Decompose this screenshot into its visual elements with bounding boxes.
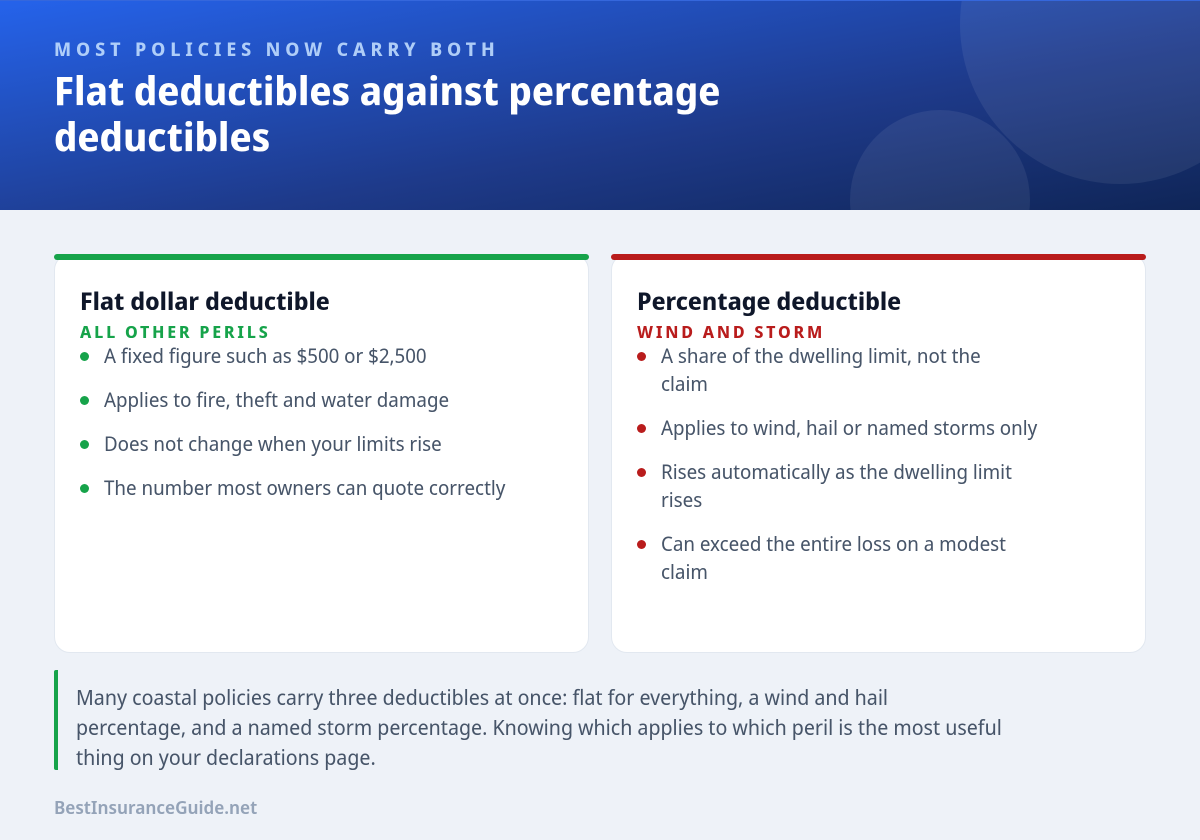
- bullet 2: Applies to fire, theft and water damage: [104, 386, 449, 413]
- footer brand: BestInsuranceGuide.net: [54, 796, 257, 820]
- bullet 3: Does not change when your limits rise: [104, 430, 442, 457]
- eyebrow: MOST POLICIES NOW CARRY BOTH: [54, 36, 500, 62]
- callout note: Many coastal policies carry three deductibles at once: flat for everything, a wind and hail: [76, 684, 888, 712]
- bullet 4: The number most owners can quote correctly: [104, 474, 505, 501]
- callout note: percentage, and a named storm percentage. Knowing which applies to which peril is the most useful: [76, 714, 1002, 742]
- card subheading: WIND AND STORM: [637, 320, 825, 343]
- panel: percentage deductible: [611, 254, 1146, 653]
- bullet 1: claim: [661, 370, 708, 397]
- card heading: Percentage deductible: [637, 285, 901, 318]
- callout note: thing on your declarations page.: [76, 744, 376, 772]
- bullet 3: [637, 458, 1012, 513]
- bullet 3: Rises automatically as the dwelling limit: [661, 458, 1012, 485]
- bullet 4: claim: [661, 558, 708, 585]
- bullet 1: A fixed figure such as $500 or $2,500: [104, 342, 427, 369]
- header banner: [0, 0, 1200, 210]
- bullet 1: A share of the dwelling limit, not the: [661, 342, 981, 369]
- bullet 4: [637, 530, 1006, 585]
- callout note: [54, 670, 1054, 770]
- card heading: Flat dollar deductible: [80, 285, 330, 318]
- green top bar: [54, 254, 589, 260]
- bullet 2: Applies to wind, hail or named storms only: [661, 414, 1037, 441]
- decorative circle large: [960, 0, 1200, 184]
- card subheading: ALL OTHER PERILS: [80, 320, 271, 343]
- bullet 4: Can exceed the entire loss on a modest: [661, 530, 1006, 557]
- bullet 3: rises: [661, 486, 702, 513]
- decorative circle small: [850, 110, 1030, 290]
- bullet 1: [637, 342, 981, 397]
- red top bar: [611, 254, 1146, 260]
- title: Flat deductibles against percentage deductibles: [54, 64, 720, 163]
- panel: flat dollar deductible: [54, 254, 589, 653]
